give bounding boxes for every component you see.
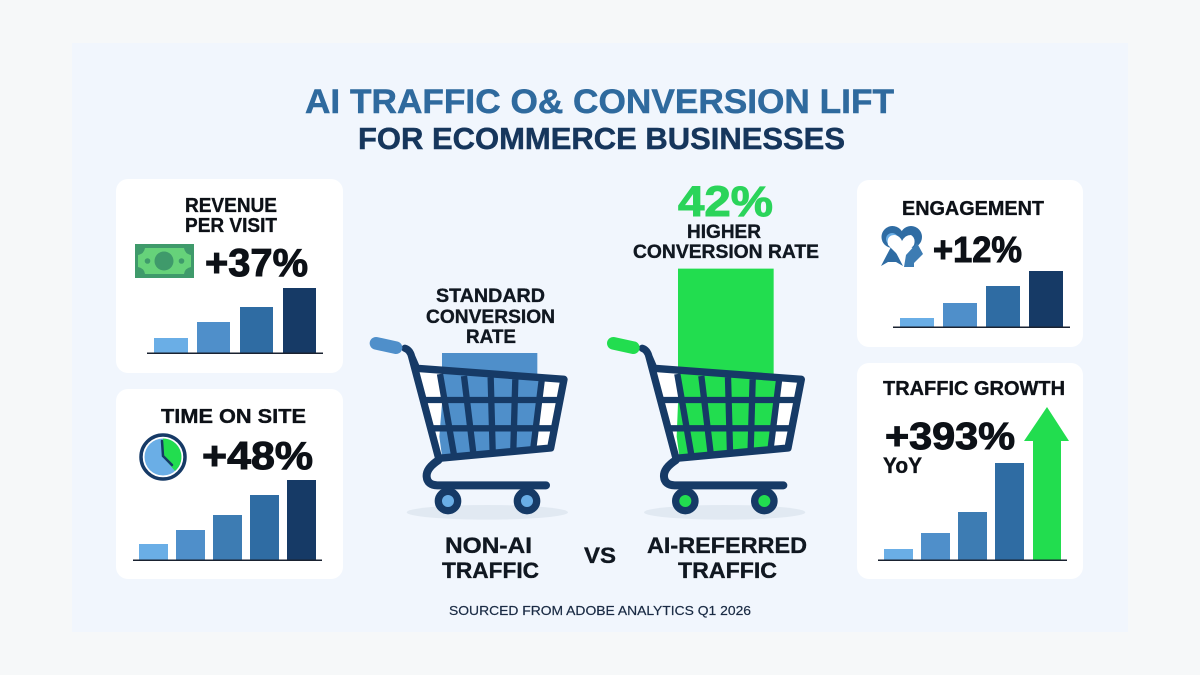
bar chart: time on site [133, 480, 322, 561]
label: standard conversion rate: STANDARD [436, 286, 545, 307]
heading: revenue per visit [185, 195, 277, 237]
bar chart: engagement [893, 271, 1070, 328]
label: AI-referred traffic [647, 533, 807, 583]
heading: revenue per visit: PER VISIT [185, 215, 277, 237]
label: higher conversion rate: CONVERSION RATE [633, 242, 819, 263]
label: AI-referred traffic: AI-REFERRED [647, 533, 807, 558]
panel: traffic growth [857, 363, 1083, 579]
icon: banknote [135, 244, 194, 278]
panel: engagement [857, 180, 1083, 347]
title: AI TRAFFIC O& CONVERSION LIFT [305, 83, 894, 121]
label: VS: VS [584, 543, 616, 568]
title: FOR ECOMMERCE BUSINESSES [358, 121, 845, 156]
arrow: green growth arrow [1024, 407, 1069, 560]
panel: time on site [116, 389, 343, 579]
label: non-AI traffic [442, 533, 539, 583]
heading: engagement: ENGAGEMENT [902, 198, 1044, 220]
title [305, 83, 894, 156]
label: standard conversion rate: CONVERSION [426, 307, 555, 328]
axis line [878, 560, 1067, 561]
panel: revenue per visit [116, 179, 343, 373]
cart: AI-referred traffic [613, 269, 805, 520]
background panel [72, 43, 1128, 632]
stat: +37%: +37% [205, 242, 308, 285]
label: non-AI traffic: TRAFFIC [442, 558, 539, 583]
stat: +393%: +393% [885, 416, 1015, 458]
label: non-AI traffic: NON-AI [445, 533, 532, 558]
heading: time on site: TIME ON SITE [161, 406, 306, 428]
label: standard conversion rate: RATE [466, 327, 516, 348]
heading: revenue per visit: REVENUE [185, 195, 277, 217]
stat: 42%: 42% [678, 178, 773, 226]
stat: +12%: +12% [933, 229, 1022, 270]
bar chart: traffic growth [884, 463, 1024, 560]
icon: clock [141, 435, 185, 479]
label: standard conversion rate [426, 286, 555, 348]
cart: non-AI traffic [376, 343, 568, 520]
source note: SOURCED FROM ADOBE ANALYTICS Q1 2026 [449, 603, 751, 618]
label: higher conversion rate [633, 222, 819, 263]
heading: traffic growth: TRAFFIC GROWTH [883, 378, 1065, 400]
label: YoY: YoY [883, 453, 922, 478]
label: higher conversion rate: HIGHER [687, 222, 761, 243]
icon: two people heart [881, 226, 923, 267]
label: AI-referred traffic: TRAFFIC [678, 558, 777, 583]
bar chart: revenue [147, 288, 323, 354]
stat: +48%: +48% [202, 435, 313, 478]
